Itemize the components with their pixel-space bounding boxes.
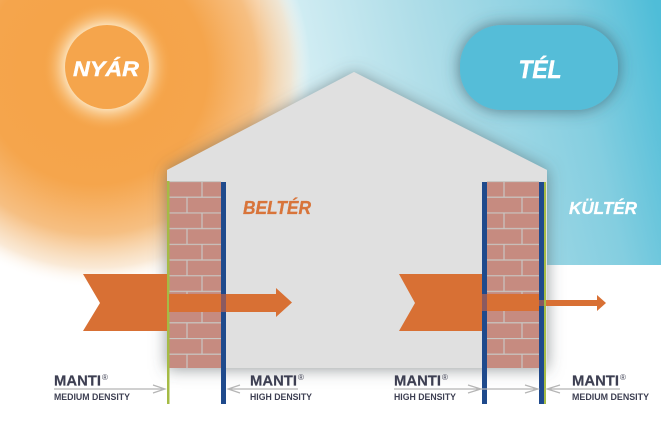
callout: manti high density, left: ®	[298, 373, 304, 382]
right green insulation	[544, 182, 546, 404]
summer background	[0, 0, 330, 300]
callout: manti medium density, right: MANTI	[572, 372, 619, 390]
callout: manti medium density, right	[547, 372, 649, 402]
house silhouette	[167, 72, 547, 368]
callout: manti high density, right: ®	[442, 373, 448, 382]
callout: manti high density, left	[228, 372, 312, 402]
label: beltér: BELTÉR	[243, 197, 311, 218]
callout: manti high density, left: MANTI	[250, 372, 297, 390]
winter cloud: TÉL	[460, 25, 618, 110]
left green insulation	[167, 181, 170, 404]
callout: manti medium density, left	[54, 372, 165, 402]
left blue insulation	[221, 182, 226, 404]
callout: manti medium density, left: MEDIUM DENSITY	[54, 392, 130, 402]
left brick wall	[169, 181, 221, 368]
callout: manti high density, right: MANTI	[394, 372, 441, 390]
summer sun: NYÁR	[43, 3, 171, 131]
callout: manti medium density, left: ®	[102, 373, 108, 382]
callout: manti medium density, left: MANTI	[54, 372, 101, 390]
callout: manti medium density, right: MEDIUM DENSITY	[572, 392, 649, 402]
callout: manti high density, right	[394, 372, 538, 402]
arrow: summer heat flow	[83, 274, 292, 331]
right brick wall	[487, 181, 539, 368]
summer sun: NYÁR: NYÁR	[73, 58, 140, 81]
callout: manti high density, left: HIGH DENSITY	[250, 392, 312, 402]
winter cloud: TÉL: TÉL	[518, 55, 562, 84]
right outer blue insulation	[539, 182, 544, 404]
winter background	[260, 0, 661, 265]
label: kültér: KÜLTÉR	[569, 197, 637, 218]
arrow: winter heat flow	[399, 274, 606, 331]
right inner blue insulation	[482, 182, 487, 404]
callout: manti medium density, right: ®	[620, 373, 626, 382]
callout: manti high density, right: HIGH DENSITY	[394, 392, 456, 402]
